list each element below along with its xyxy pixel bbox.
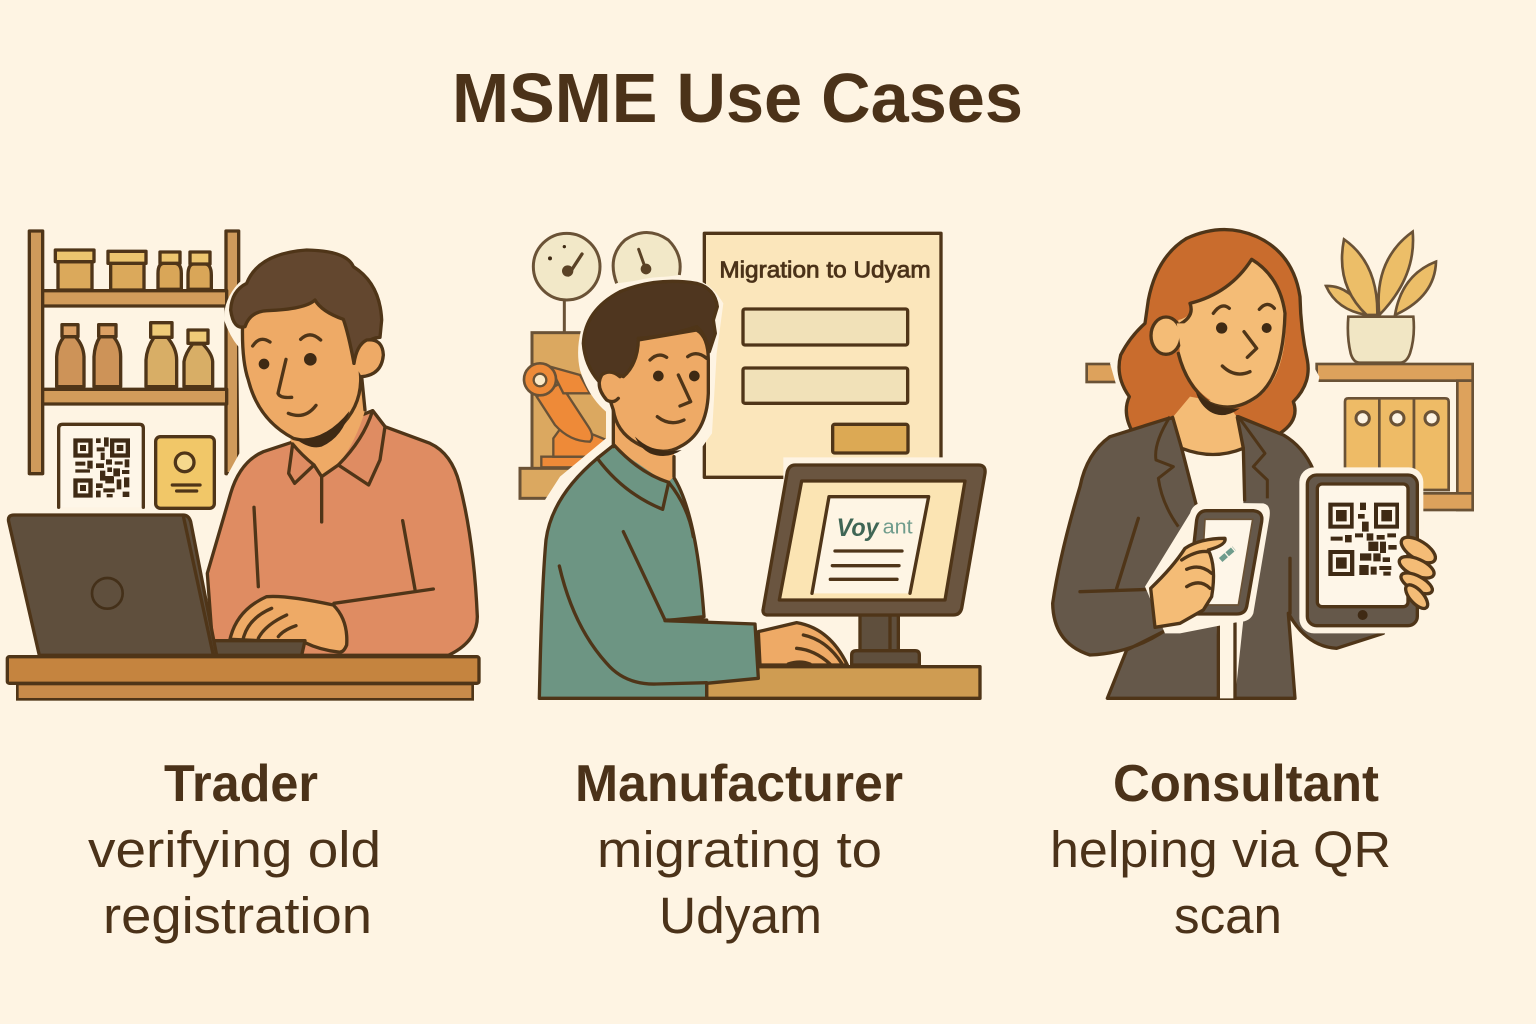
desk (707, 667, 980, 698)
caption: manufacturer (575, 755, 903, 944)
desk (7, 657, 479, 699)
holding hand fingers (1396, 532, 1439, 612)
screen logo text: Voy (837, 514, 880, 542)
caption: consultant (1050, 755, 1391, 944)
caption: trader (88, 755, 381, 944)
man in green sweater (539, 281, 847, 698)
monitor: ant (883, 516, 913, 539)
caption: manufacturer: Udyam (659, 887, 822, 944)
wall shelf with binders (1087, 364, 1473, 510)
caption: consultant: scan (1174, 887, 1282, 944)
panel: consultant illustration (1053, 227, 1473, 698)
halo (541, 277, 723, 513)
title: MSME Use Cases (452, 59, 1023, 137)
halo (1110, 227, 1319, 433)
ID card (156, 437, 214, 508)
caption: trader: Trader (164, 755, 318, 813)
laptop (8, 515, 305, 655)
form heading: Migration to Udyam (719, 256, 931, 282)
shelf with jars and bottles (29, 231, 239, 474)
halo (757, 457, 990, 620)
phone with halo (1145, 503, 1270, 633)
migration form board (704, 233, 941, 477)
woman with red hair (1053, 230, 1383, 698)
caption: manufacturer: Manufacturer (575, 755, 903, 813)
robot arm machine (520, 333, 612, 498)
monitor (763, 465, 985, 665)
potted plant (1326, 232, 1436, 363)
caption: trader: verifying old (88, 821, 381, 878)
tablet with QR code (1299, 467, 1439, 633)
caption: consultant: Consultant (1113, 755, 1379, 813)
panel: trader illustration (7, 231, 482, 699)
man in shirt (207, 250, 477, 655)
panel: manufacturer illustration (520, 232, 990, 698)
caption: consultant: helping via QR (1050, 821, 1391, 878)
caption: trader: registration (103, 887, 372, 944)
caption: manufacturer: migrating to (597, 821, 882, 878)
gauges (533, 232, 680, 332)
halo (200, 253, 482, 653)
QR poster (59, 424, 143, 507)
